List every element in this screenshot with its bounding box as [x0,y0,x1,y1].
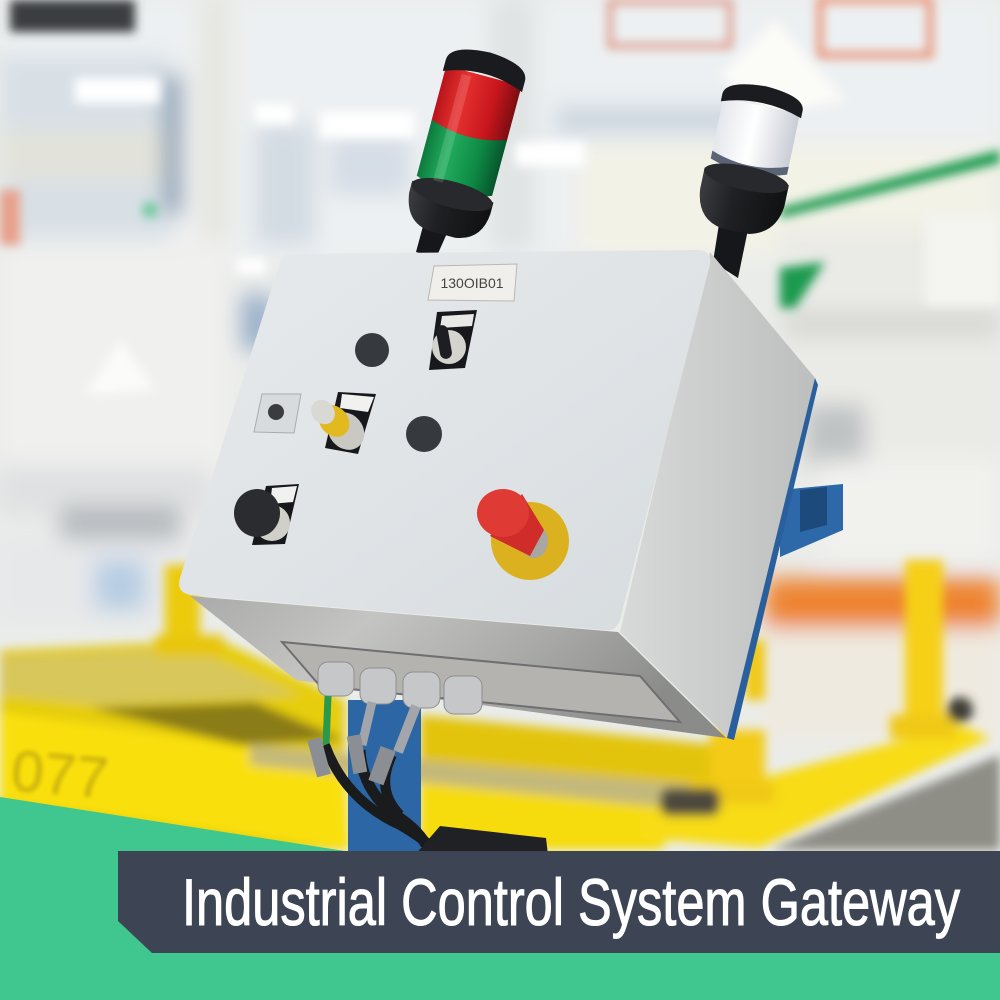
stack light: white [693,77,808,278]
wall socket plate [254,394,301,433]
yellow machine base and floor [0,560,1000,850]
key switch [306,392,376,457]
blue rear edge [727,378,818,740]
green corner shape [0,797,1000,1000]
box underside [190,596,726,738]
yellow machine base and floor: 077 [9,738,111,811]
control box enclosure [179,250,818,740]
title banner [118,851,1000,953]
nameplate: 130OIB01 [440,275,504,291]
stack light: red and green [401,42,531,258]
round plugs [355,333,442,452]
box front panel [179,250,710,630]
cable glands and cables [307,662,548,855]
rotary selector switch [429,310,477,370]
blue mounting post and bracket [348,484,843,855]
black push button [234,484,299,545]
nameplate [428,264,517,301]
box side panel [620,252,815,738]
emergency stop button [477,489,569,580]
